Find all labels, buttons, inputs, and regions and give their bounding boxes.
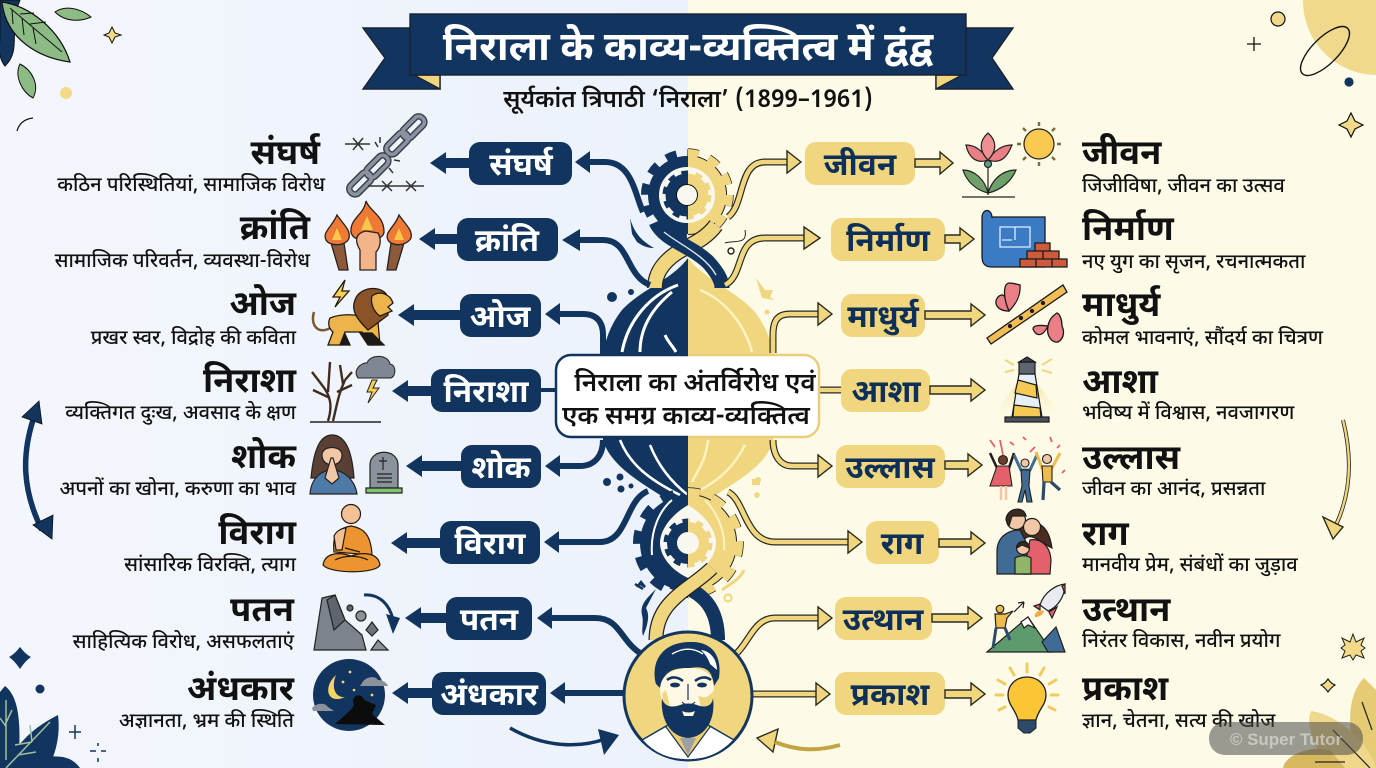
pill	[805, 142, 915, 188]
description: प्रखर स्वर, विद्रोह की कविता	[91, 325, 297, 353]
icon: family embrace	[997, 509, 1052, 574]
icon: bare tree and storm cloud	[310, 356, 395, 422]
central figure: twisted bands and gears	[603, 153, 775, 640]
right description: राग: मानवीय प्रेम, संबंधों का जुड़ाव	[1082, 552, 1298, 580]
icon: grieving woman and tombstone	[310, 435, 402, 494]
right description: उत्थान: निरंतर विकास, नवीन प्रयोग	[1082, 628, 1281, 656]
pill	[469, 142, 572, 188]
icon: lighthouse	[990, 357, 1066, 422]
pill: माधुर्य	[847, 298, 920, 340]
pill	[446, 597, 532, 643]
pill	[841, 369, 930, 415]
bottom yellow return arrow	[775, 742, 840, 749]
pill: पतन	[460, 602, 519, 643]
row 2 right: निर्माण	[831, 210, 1067, 267]
pill: संघर्ष	[489, 146, 554, 188]
beard	[662, 698, 713, 738]
description: सामाजिक परिवर्तन, व्यवस्था-विरोध	[55, 248, 311, 276]
row 5 left: शोक	[60, 435, 541, 504]
heading: ओज	[229, 283, 297, 330]
pill	[440, 521, 540, 567]
right connector arrowheads	[757, 151, 862, 752]
icon: light bulb	[996, 664, 1058, 733]
pill	[461, 445, 541, 491]
pill: क्रांति	[475, 222, 540, 264]
central box	[556, 355, 819, 437]
portrait circle	[624, 632, 752, 760]
pill: अंधकार	[440, 677, 539, 718]
watermark	[1209, 722, 1363, 755]
arrow	[430, 152, 469, 174]
icon: meditating monk	[323, 504, 380, 572]
splashes	[630, 218, 654, 248]
pill: उत्थान	[843, 602, 924, 643]
right column heading: आशा: आशा	[1082, 363, 1159, 408]
arrow	[406, 455, 461, 477]
pill: ओज	[470, 298, 532, 340]
pill	[835, 672, 945, 718]
pill: उल्लास	[845, 450, 936, 491]
watermark: © Super Tutor	[1230, 730, 1343, 749]
arrow	[391, 532, 440, 554]
decoration: bottom-right leaves and stars	[1283, 634, 1376, 768]
description: अपनों का खोना, करुणा का भाव	[60, 476, 297, 504]
subtitle: सूर्यकांत त्रिपाठी ‘निराला’ (1899–1961)	[503, 85, 873, 117]
row 3 left: ओज	[91, 280, 541, 353]
pill: जीवन	[824, 146, 897, 188]
pill	[460, 294, 541, 340]
pill	[866, 521, 939, 567]
arrow	[398, 304, 460, 326]
right description: निर्माण: नए युग का सृजन, रचनात्मकता	[1082, 251, 1306, 277]
pill: राग	[881, 526, 924, 567]
icon: blueprint and bricks	[982, 210, 1067, 267]
row 5 right: उल्लास	[836, 437, 1065, 502]
bulb right half	[688, 258, 773, 520]
upper navy strand	[656, 222, 722, 288]
description: साहित्यिक विरोध, असफलताएं	[73, 629, 295, 657]
lower navy strand	[672, 582, 718, 640]
right column heading: राग: राग	[1082, 515, 1129, 560]
arrow	[945, 228, 974, 250]
arrow	[930, 379, 985, 401]
right column heading: उल्लास: उल्लास	[1082, 439, 1181, 484]
lower yellow strand	[656, 568, 712, 640]
background: left half	[0, 0, 688, 768]
description: अज्ञानता, भ्रम की स्थिति	[119, 708, 294, 736]
arrow	[945, 454, 982, 476]
decoration: top-right shapes	[1247, 0, 1376, 137]
description: व्यक्तिगत दुःख, अवसाद के क्षण	[64, 400, 297, 428]
pill: निर्माण	[846, 222, 931, 264]
description: सांसारिक विरक्ति, त्याग	[124, 552, 296, 580]
heading: निराशा	[203, 360, 297, 407]
icon: lotus and sun	[962, 122, 1061, 197]
heading: पतन	[230, 591, 295, 636]
face	[660, 668, 714, 728]
decoration: bottom-left leaves	[0, 647, 106, 768]
row 1 left: संघर्ष	[57, 114, 572, 200]
title banner: निराला के काव्य-व्यक्तित्व में द्वंद्व	[443, 24, 935, 77]
arrow	[939, 532, 985, 554]
upper gear yellow half	[688, 148, 734, 236]
pill: प्रकाश	[851, 677, 930, 718]
eyes and brows	[667, 677, 711, 681]
heading: विराग	[218, 512, 297, 559]
right column heading: जीवन: जीवन	[1082, 132, 1162, 179]
icon: lion	[313, 280, 393, 345]
row 6 right: राग	[866, 509, 1052, 574]
right column heading: माधुर्य: माधुर्य	[1082, 285, 1161, 331]
lower gear yellow half	[688, 487, 744, 599]
description: कठिन परिस्थितियां, सामाजिक विरोध	[57, 172, 326, 200]
row 3 right: माधुर्य	[841, 283, 1067, 344]
pill: विराग	[455, 525, 526, 567]
pill: आशा	[851, 374, 921, 415]
central box: एक समग्र काव्य-व्यक्तित्व	[562, 401, 811, 435]
upper yellow strand	[655, 225, 716, 288]
right curved connector arrows	[725, 162, 850, 694]
left curved connector arrows	[510, 162, 650, 745]
pill	[457, 218, 558, 264]
heading: संघर्ष	[250, 133, 321, 179]
row 8 right: प्रकाश	[835, 664, 1058, 733]
row 7 left: पतन	[73, 591, 532, 657]
icon: climber on mountain and rocket	[987, 584, 1065, 652]
arrow	[945, 683, 985, 705]
upper gear navy half	[641, 149, 688, 238]
lower gear navy half	[633, 490, 688, 598]
row 2 left: क्रांति	[55, 201, 558, 276]
arrow	[915, 152, 953, 174]
arrow	[392, 380, 431, 402]
right column heading: निर्माण: निर्माण	[1082, 208, 1175, 255]
arrow	[405, 607, 446, 629]
right description: माधुर्य: कोमल भावनाएं, सौंदर्य का चित्रण	[1082, 325, 1324, 353]
icon: night sky with silhouette	[312, 659, 388, 731]
row 1 right: जीवन	[805, 122, 1061, 197]
icon: falling rocks with arrow	[314, 595, 400, 650]
right description: आशा: भविष्य में विश्वास, नवजागरण	[1082, 400, 1295, 428]
heading: अंधकार	[187, 669, 295, 715]
left connector arrowheads	[537, 151, 619, 755]
row 7 right: उत्थान	[835, 584, 1065, 652]
right description: जीवन: जिजीविषा, जीवन का उत्सव	[1082, 173, 1285, 201]
bulb left half	[603, 258, 688, 520]
right column heading: प्रकाश: प्रकाश	[1082, 670, 1169, 715]
decorative right curved arrow	[1323, 420, 1349, 539]
right description: प्रकाश: ज्ञान, चेतना, सत्य की खोज	[1082, 708, 1276, 736]
pill	[831, 218, 945, 264]
title banner	[363, 14, 1013, 89]
icon: torches and fist	[325, 201, 411, 270]
arrow	[419, 228, 457, 250]
arrow	[925, 304, 985, 326]
shirt	[642, 725, 734, 760]
icon: flute and butterflies	[987, 283, 1067, 344]
pill: शोक	[471, 449, 532, 491]
decorative left double-headed curved arrow	[22, 401, 53, 539]
central box: निराला का अंतर्विरोध एवं	[574, 367, 816, 402]
row 6 left: विराग	[124, 504, 540, 580]
row 4 right: आशा	[841, 357, 1066, 422]
decoration: top-left leaves	[0, 0, 121, 131]
row 8 left: अंधकार	[119, 659, 546, 736]
heading: क्रांति	[240, 207, 311, 254]
background: right half	[688, 0, 1376, 768]
row 4 left: निराशा	[64, 356, 541, 428]
arrow	[932, 607, 982, 629]
arrow	[392, 682, 432, 704]
icon: celebrating people	[990, 437, 1065, 502]
pill	[431, 369, 541, 415]
white streaks in bulb	[622, 285, 678, 352]
icon: broken chain	[345, 114, 426, 196]
right description: उल्लास: जीवन का आनंद, प्रसन्नता	[1082, 476, 1266, 504]
hair	[655, 642, 720, 688]
heading: शोक	[231, 436, 297, 483]
right column heading: उत्थान: उत्थान	[1082, 591, 1171, 636]
pill: निराशा	[444, 373, 529, 415]
